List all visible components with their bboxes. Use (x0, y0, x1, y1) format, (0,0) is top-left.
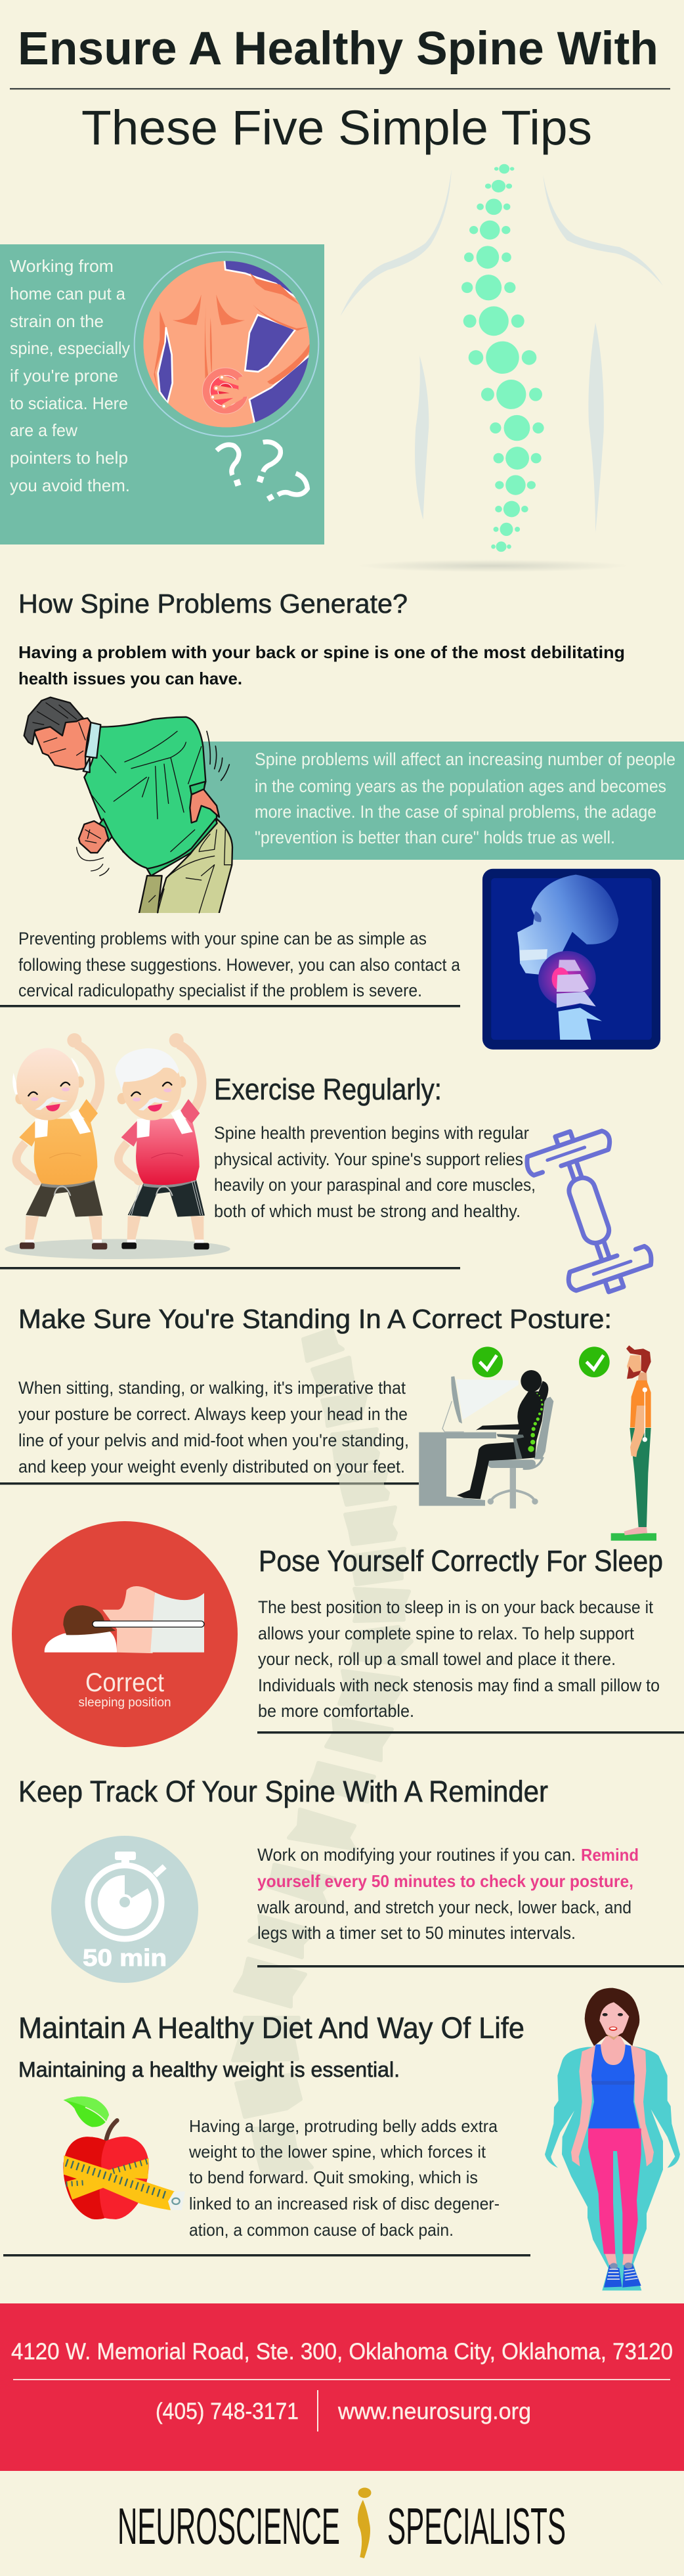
text: preventing problems: following these suggestions. However, you can also contact a (18, 955, 460, 975)
text: exercise (214, 1123, 536, 1221)
text: sleep: Individuals with neck stenosis may find a small pillow to (258, 1676, 660, 1695)
icon: check mark seated (472, 1346, 503, 1377)
text: sleep: allows your complete spine to relax. To help support (258, 1624, 635, 1643)
text: reminder: yourself every 50 minutes to check your posture, (257, 1871, 633, 1891)
panel: spine problems band: in the coming years as the population ages and becomes (255, 776, 666, 796)
illustration: seniors exercising (5, 1033, 230, 1259)
illustration: neck x-ray (482, 869, 660, 1050)
icon: dumbbell (521, 1120, 658, 1304)
intro text: if you're prone (10, 366, 118, 386)
illustration: spine and torso outline (340, 164, 663, 572)
figure: right senior (116, 1033, 209, 1249)
panel: spine problems band: more inactive. In the case of spinal problems, the adage (255, 802, 656, 822)
text: sleep: be more comfortable. (258, 1701, 414, 1721)
figure: seated woman at desk (419, 1370, 553, 1509)
text: sleep: your neck, roll up a small towel and place it there. (258, 1649, 616, 1669)
phone: (405) 748-3171 (156, 2399, 299, 2424)
intro text: spine, especially (10, 338, 130, 358)
intro text: home can put a (10, 284, 126, 303)
panel: spine problems band: "prevention is better than cure" holds true as well. (255, 828, 615, 847)
icon: check mark standing (579, 1346, 610, 1377)
heading: diet: Maintain A Healthy Diet And Way Of Life (18, 2011, 524, 2045)
heading: exercise regularly: Exercise Regularly: (214, 1073, 442, 1106)
intro text: to sciatica. Here (10, 393, 128, 413)
illustration: woman with body silhouette (545, 1988, 680, 2290)
text: reminder: walk around, and stretch your neck, lower back, and (257, 1898, 631, 1917)
logo: Neuroscience Specialists: NEUROSCIENCE (118, 2497, 340, 2555)
text: exercise: heavily on your paraspinal and core muscles, (214, 1175, 536, 1195)
text: preventing problems: Preventing problems with your spine can be as simple as (18, 929, 427, 948)
illustration: back pain circle and question marks (135, 252, 320, 502)
intro text: strain on the (10, 311, 104, 331)
bold intro statement: Having a problem with your back or spine is one of the most debilitating (18, 642, 625, 662)
text: posture: and keep your weight evenly distributed on your feet. (18, 1457, 405, 1477)
illustration: man with back pain (24, 698, 232, 914)
icon: 50 minute timer: 50 min (83, 1944, 167, 1971)
text: posture (18, 1378, 409, 1477)
bold intro statement (18, 642, 625, 688)
intro text: Working from (10, 256, 114, 276)
text: posture: your posture be correct. Always keep your head in the (18, 1404, 408, 1424)
illustration: correct sleeping position (12, 1521, 238, 1747)
panel: contact footer (0, 2303, 684, 2471)
text: preventing problems (18, 929, 460, 1000)
intro text: you avoid them. (10, 476, 130, 495)
text: exercise: Spine health prevention begins with regular (214, 1123, 529, 1143)
text: posture: line of your pelvis and mid-foot when you're standing, (18, 1431, 409, 1450)
illustration: correct posture figures (419, 1345, 656, 1541)
text: diet: linked to an increased risk of disc degener- (189, 2194, 500, 2213)
text: exercise: physical activity. Your spine's support relies (214, 1149, 523, 1169)
text: diet (188, 2116, 500, 2240)
figure: left senior (12, 1033, 107, 1249)
text: diet: Having a large, protruding belly adds extra (189, 2116, 498, 2136)
icon: apple with measuring tape (63, 2097, 185, 2219)
bold intro statement: health issues you can have. (18, 669, 242, 688)
text: reminder: Work on modifying your routines if you can. (257, 1845, 576, 1865)
title: These Five Simple Tips (81, 100, 592, 155)
panel: intro (0, 244, 324, 544)
icon: 50 minute timer (51, 1836, 198, 1983)
text: diet: weight to the lower spine, which forces it (188, 2142, 486, 2162)
text: sleep (258, 1597, 660, 1721)
title: Ensure A Healthy Spine With (18, 23, 658, 75)
text: preventing problems: cervical radiculopathy specialist if the problem is severe. (18, 981, 422, 1000)
watermark: vertebral column (233, 1329, 412, 2174)
text: reminder: Remind (581, 1845, 639, 1865)
title (10, 23, 670, 155)
subheading: healthy weight: Maintaining a healthy weight is essential. (18, 2058, 400, 2081)
text: exercise: both of which must be strong and healthy. (214, 1201, 521, 1221)
text: sleep: The best position to sleep in is on your back because it (258, 1597, 654, 1617)
intro text (10, 256, 130, 495)
website: www.neurosurg.org (337, 2399, 531, 2424)
intro text: pointers to help (10, 448, 128, 468)
illustration: correct sleeping position: Correct (85, 1668, 164, 1697)
figure: standing man (611, 1345, 656, 1541)
panel: spine problems band (203, 742, 684, 860)
text: diet: ation, a common cause of back pain. (189, 2220, 454, 2240)
text: reminder (257, 1845, 639, 1943)
text: reminder: legs with a timer set to 50 minutes intervals. (257, 1923, 576, 1943)
text: posture: When sitting, standing, or walking, it's imperative that (18, 1378, 406, 1398)
heading: correct posture: Make Sure You're Standing In A Correct Posture: (18, 1304, 612, 1334)
illustration: correct sleeping position: sleeping position (79, 1696, 171, 1710)
icon: gold spine figure (358, 2487, 371, 2558)
intro text: are a few (10, 420, 77, 440)
heading: reminder: Keep Track Of Your Spine With A Reminder (18, 1775, 548, 1808)
text: diet: to bend forward. Quit smoking, which is (189, 2167, 478, 2187)
heading: how spine problems generate: How Spine Problems Generate? (18, 588, 408, 619)
